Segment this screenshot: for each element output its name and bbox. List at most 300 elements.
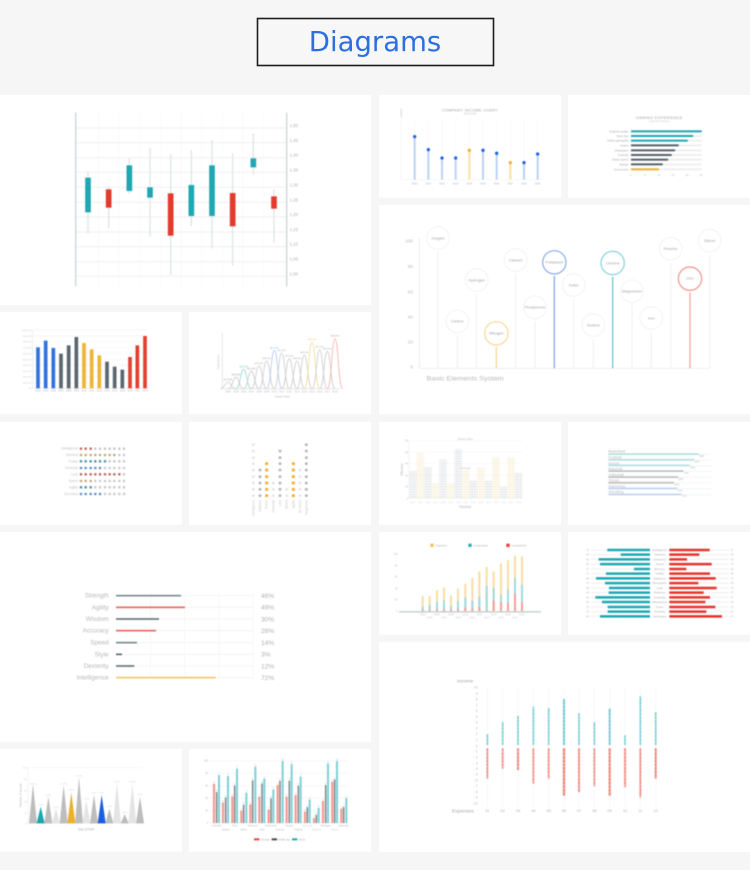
panel: yearly bar chart: 2010: [81, 389, 87, 392]
panel: grouped bars by state: Montana: [248, 825, 258, 828]
dot rows: [80, 447, 125, 495]
panel: company income chart: 2013: [453, 182, 459, 185]
panel: diverging attribute bars: 70: [586, 611, 590, 614]
panel: basic elements system: Sulfur: [569, 283, 579, 287]
panel: gaming experience: Online gameplay: [607, 139, 629, 143]
panel: fiscal year bell curves: 2013: [294, 390, 300, 393]
panel: gaming experience: Replay: [620, 162, 629, 166]
panel: stacked satisfaction bars: 2004: [420, 614, 426, 617]
panel: skill dot matrix rows: Power: [69, 459, 79, 463]
panel: stacked satisfaction bars: 40: [395, 587, 398, 590]
value labels: $48,000: [293, 358, 302, 360]
panel: triangle chart year of birth: 20: [24, 813, 27, 815]
value labels: $25,000: [232, 374, 241, 376]
panel: skill dot matrix rows: Luck: [71, 472, 78, 476]
value labels: 61: [325, 783, 327, 785]
panel: income and expenses: 12: [654, 809, 658, 813]
value labels: 68: [288, 779, 290, 781]
chart title: [636, 116, 683, 123]
value labels: 50: [216, 790, 218, 792]
value labels: 22: [340, 807, 342, 809]
panel: grouped bars by state: Minnesota: [265, 825, 277, 828]
value labels: $64,000: [323, 348, 332, 350]
price axis labels: 1,40: [290, 153, 299, 158]
panel: fiscal year bell curves: Fiscal Year: [275, 394, 290, 398]
panel: dotted column chart: 2014: [486, 502, 492, 504]
panel: diverging attribute bars: 29: [731, 558, 734, 561]
panel: basic elements system: [379, 205, 750, 414]
chart title: [442, 108, 498, 116]
panel: diverging attribute bars: 90: [586, 596, 590, 599]
red stacks: [423, 594, 522, 612]
y axis labels: - 3: [474, 761, 478, 765]
panel: triangle chart year of birth: 10,600: [129, 781, 136, 783]
panel: skill percentage bars: [0, 532, 371, 742]
value labels: 24: [318, 806, 320, 808]
value labels: 96: [327, 761, 329, 763]
panel: skill dot matrix columns: Toughness: [304, 500, 308, 515]
panel: yearly bar chart: 2017: [135, 389, 141, 392]
panel: skill percentage bars: Accuracy: [83, 628, 109, 635]
axis titles: Income: [457, 678, 474, 684]
legend: Satisfied: [435, 543, 447, 547]
panel: basic elements system: 40: [408, 315, 413, 320]
panel: triangle chart year of birth: Year of birth: [78, 828, 95, 832]
middle age bars: [217, 779, 344, 823]
curves: [220, 339, 343, 389]
panel: company income chart: 2011: [426, 182, 432, 185]
value labels: $67,000: [315, 347, 325, 349]
panel: fiscal year bell curves: 2006: [241, 390, 247, 393]
panel: skill dot matrix columns: Accuracy: [298, 500, 302, 513]
lollipop dots: [413, 135, 539, 164]
legend: Senior: [298, 838, 306, 841]
y axis labels: 0: [476, 744, 478, 748]
panel: basic elements system: Phosphorus: [525, 306, 545, 310]
panel: skill dot matrix rows: Dexterity: [65, 466, 78, 470]
panel: sports horizontal bars: Soccer: [608, 461, 620, 465]
y axis labels: - 5: [474, 773, 478, 777]
price axis labels: 1,35: [290, 168, 299, 173]
panel: gaming experience: 20: [686, 174, 689, 177]
panel: triangle chart year of birth: 5,400: [84, 798, 90, 800]
panel: diverging attribute bars: 57: [731, 592, 734, 595]
value labels: 72: [263, 776, 265, 778]
panel: company income chart: Income: [399, 108, 403, 117]
panel: stacked satisfaction bars: 60: [395, 576, 398, 579]
value labels: 64: [261, 781, 263, 783]
y axis labels: - 8: [474, 790, 478, 794]
panel: sports horizontal bars: 71%: [682, 495, 687, 498]
value labels: 18: [304, 810, 306, 812]
panel: yearly bar chart: 2015: [120, 389, 126, 392]
attribute labels: Honesty: [654, 610, 666, 614]
panel: triangle chart year of birth: 6,500: [46, 795, 52, 797]
panel: yearly bar chart: 2009: [74, 389, 80, 392]
panel: basic elements system: Oxygen: [431, 236, 445, 240]
bars: [116, 595, 216, 678]
panel: sports horizontal bars: 79%: [690, 466, 696, 469]
panel: diverging attribute bars: 85: [586, 558, 590, 561]
panel: company income chart: 2019: [535, 182, 541, 185]
panel: gaming experience: 10: [658, 174, 661, 177]
panel: triangle chart year of birth: 100: [23, 768, 27, 770]
panel: grouped bars by state: Michigan: [321, 825, 331, 828]
value labels: $53,000: [285, 356, 294, 358]
panel: sports horizontal bars: Baseball: [608, 467, 623, 471]
legend: Undecided: [473, 543, 488, 547]
panel: grouped bars by state: Ohio: [232, 825, 238, 828]
panel: diverging attribute bars: 73: [586, 573, 590, 576]
value labels: 68: [252, 778, 254, 780]
panel: diverging attribute bars: 69: [586, 592, 590, 595]
panel: diverging attribute bars: 87: [731, 615, 734, 618]
candlestick bodies: [85, 158, 277, 236]
value labels: 42: [258, 795, 260, 797]
panel: skill dot matrix rows: Speed: [68, 479, 78, 483]
percentage values: 30%: [261, 616, 274, 623]
value labels: $33,000: [239, 366, 249, 368]
panel: stacked satisfaction bars: [379, 532, 561, 635]
panel: company income chart: 2017: [508, 182, 514, 185]
panel: dotted column chart: Average: [461, 466, 471, 470]
panel: stacked satisfaction bars: 2005: [427, 617, 433, 620]
panel: grouped bars by state: Kentucky: [302, 825, 313, 828]
panel: income and expenses: [379, 642, 750, 852]
panel: gaming experience: Characters: [614, 148, 629, 152]
lollipop stems: [415, 137, 538, 180]
panel: sports horizontal bars: 68%: [679, 478, 684, 481]
price axis labels: 1,10: [290, 242, 299, 247]
price axis labels: 1,05: [290, 257, 299, 262]
panel: yearly bar chart: 2016: [127, 389, 133, 392]
panel: skill percentage bars: Strength: [85, 593, 109, 600]
senior bars: [219, 761, 346, 823]
value labels: 60: [234, 783, 236, 785]
value labels: 25: [306, 805, 308, 807]
percentage values: 3%: [261, 652, 271, 659]
value labels: $61,000: [277, 350, 287, 352]
panel: diverging attribute bars: 60: [731, 601, 734, 604]
price axis labels: [290, 123, 299, 276]
panel: yearly bar chart: 2004: [35, 389, 41, 392]
attribute labels: Charisma: [653, 557, 666, 561]
panel: company income chart: 2018: [521, 182, 527, 185]
panel: diverging attribute bars: 49: [586, 554, 590, 557]
panel: stacked satisfaction bars: 2013: [484, 617, 490, 620]
panel: dotted column chart: 50: [405, 440, 409, 443]
panel: triangle chart year of birth: 80: [24, 779, 27, 781]
percentage values: 14%: [261, 640, 274, 647]
value labels: 43: [231, 794, 233, 796]
panel: yearly bar chart: 2012: [97, 389, 103, 392]
panel: skill dot matrix rows: Intelligence: [61, 447, 78, 451]
attribute labels: Vitality: [655, 572, 665, 576]
panel: fiscal year bell curves: 2010: [272, 390, 278, 393]
y axis labels: 4: [476, 721, 478, 725]
percentage values: 12%: [261, 663, 274, 670]
panel: grouped bars by state: Utah: [259, 828, 265, 831]
panel: yearly bar chart: $20,000: [23, 377, 32, 379]
panel: company income chart: 2012: [439, 182, 445, 185]
triangles: [29, 777, 144, 823]
legend: [254, 838, 306, 841]
panel: skill dot matrix columns: Intelligence: [251, 500, 255, 516]
panel: diverging attribute bars: 79: [731, 587, 734, 590]
value labels: $85,000: [331, 336, 340, 338]
element bubbles: [427, 227, 721, 345]
panel: income and expenses: 01: [485, 809, 489, 813]
panel: triangle chart year of birth: 12,400: [76, 775, 83, 777]
value labels: 54: [272, 787, 274, 789]
panel: yearly bar chart: $0: [29, 388, 32, 390]
y axis labels: - 9: [474, 796, 478, 800]
panel: gaming experience: Story line: [617, 134, 629, 138]
value labels: $67,000: [270, 347, 279, 349]
panel: yearly bar chart: 2018: [142, 389, 148, 392]
attribute labels: Patience: [654, 591, 666, 595]
legend: Middle age: [278, 838, 291, 841]
panel: yearly bar chart: $70,000: [23, 348, 32, 350]
panel: gaming experience: Sound: [620, 143, 629, 147]
panel: triangle chart year of birth: 3,500: [38, 805, 44, 807]
panel: triangle chart year of birth: 6,800: [137, 794, 143, 796]
panel: gaming experience: Graphic quality: [609, 129, 629, 133]
panel: triangle chart year of birth: 2,900: [53, 807, 59, 809]
panel: basic elements system: Potassium: [545, 261, 563, 265]
panel: sports horizontal bars: Basketball: [608, 450, 625, 454]
axis titles: Expenses: [452, 808, 474, 814]
panel: grouped bars by state: Arkansas: [338, 825, 350, 828]
panel: stacked satisfaction bars: 2018: [519, 614, 525, 617]
value labels: 77: [218, 773, 220, 775]
panel: stacked satisfaction bars: 2016: [505, 614, 511, 617]
value labels: 70: [334, 777, 336, 779]
y axis labels: - 10: [472, 802, 478, 806]
panel: skill dot matrix columns: Speed: [285, 500, 289, 509]
panel: income and expenses: 11: [638, 809, 642, 813]
panel: grouped bars by state: Idaho: [241, 828, 247, 831]
panel: fiscal year bell curves: 2015: [309, 390, 315, 393]
panel: diverging attribute bars: 80: [586, 601, 590, 604]
value labels: 100: [281, 759, 284, 761]
panel: gaming experience: Community: [614, 167, 629, 171]
panel: fiscal year bell curves: 2016: [317, 390, 323, 393]
panel: company income chart: [379, 95, 561, 198]
price axis labels: 1,30: [290, 182, 299, 187]
panel: dotted column chart: Market Value: [458, 437, 474, 441]
panel: dotted column chart: Timeline: [459, 505, 471, 509]
panel: gaming experience: 5: [644, 174, 646, 177]
panel: gaming experience: Game speed: [612, 158, 629, 162]
panel: diverging attribute bars: 75: [586, 549, 590, 552]
price axis labels: 1,25: [290, 197, 299, 202]
panel: basic elements system: 60: [408, 289, 413, 294]
panel: basic elements system: Sodium: [587, 323, 600, 327]
panel: income and expenses: 06: [562, 809, 566, 813]
y axis labels: - 1: [474, 750, 478, 754]
panel: skill percentage bars: Wisdom: [86, 616, 109, 623]
panel: dotted column chart: 2018: [516, 502, 522, 504]
teenage bars: [214, 782, 341, 823]
attribute labels: Speed: [655, 562, 664, 566]
attribute labels: Intelligence: [652, 548, 668, 552]
y axis labels: 3: [476, 726, 478, 730]
panel: dotted column chart: 40: [405, 451, 409, 454]
panel: dotted column chart: 2006: [425, 502, 431, 504]
panel: stacked satisfaction bars: 2017: [512, 617, 518, 620]
panel: yearly bar chart: $50,000: [23, 359, 32, 361]
panel: diverging attribute bars: 48: [731, 582, 734, 585]
value labels: 42: [286, 795, 288, 797]
panel: sports horizontal bars: Swimming: [608, 484, 625, 488]
bars: [631, 130, 702, 170]
panel: dotted column chart: 20: [405, 474, 409, 477]
panel: stacked satisfaction bars: 2006: [434, 614, 440, 617]
attribute labels: Technique: [653, 614, 667, 618]
panel: yearly bar chart: $60,000: [23, 353, 32, 355]
panel: triangle chart year of birth: 8,000: [69, 790, 75, 792]
legend: [430, 543, 526, 547]
panel: dotted column chart: 2011: [463, 502, 469, 504]
panel: yearly bar chart: $90,000: [23, 336, 32, 338]
panel: yearly bar chart: $80,000: [23, 342, 32, 344]
value labels: 49: [245, 791, 247, 793]
panel: triangle chart year of birth: [0, 749, 182, 852]
panel: grouped bars by state: 100: [204, 760, 209, 763]
value labels: $48,000: [262, 358, 272, 360]
value labels: 25: [343, 805, 345, 807]
attribute labels: Diligence: [654, 576, 666, 580]
panel: yearly bar chart: $100,000: [22, 330, 32, 332]
price axis labels: 1,50: [290, 123, 299, 128]
y axis labels: 9: [476, 692, 478, 696]
title: Diagrams: [258, 18, 494, 66]
panel: stacked satisfaction bars: 2012: [477, 614, 483, 617]
value labels: 68: [279, 779, 281, 781]
panel: income and expenses: 07: [577, 809, 581, 813]
legend: Teenage: [260, 838, 270, 841]
y axis labels: - 4: [474, 767, 478, 771]
panel: diverging attribute bars: 28: [731, 568, 734, 571]
panel: yearly bar chart: 2005: [43, 389, 49, 392]
panel: grouped bars by state: 80: [205, 772, 209, 775]
value labels: 63: [213, 782, 215, 784]
right red bars: [669, 550, 722, 616]
neutral stems: [438, 252, 710, 368]
value labels: [213, 759, 347, 818]
panel: gaming experience: [568, 95, 750, 198]
panel: yearly bar chart: $40,000: [23, 365, 32, 367]
panel: diverging attribute bars: 88: [586, 577, 590, 580]
attribute labels: Perception: [653, 581, 667, 585]
panel: sports horizontal bars: Wrestling: [608, 490, 624, 494]
panel: basic elements system: Iron: [648, 316, 655, 320]
panel: yearly bar chart: [0, 312, 182, 414]
panel: yearly bar chart: $10,000: [23, 383, 32, 385]
panel: sports horizontal bars: 88%: [699, 455, 705, 458]
panel: income and expenses: 03: [516, 809, 520, 813]
panel: triangle chart year of birth: 10,500: [114, 782, 121, 784]
value labels: $80,000: [308, 339, 317, 341]
panel: skill dot matrix rows: Accuracy: [64, 492, 78, 496]
panel: diverging attribute bars: 78: [731, 606, 734, 609]
percentage values: 28%: [261, 628, 274, 635]
panel: diverging attribute bars: 68: [586, 587, 590, 590]
panel: skill dot matrix columns: Dexterity: [271, 500, 275, 512]
panel: skill dot matrix rows: Stamina: [66, 453, 78, 457]
panel: fiscal year bell curves: 2005: [233, 390, 239, 393]
panel: basic elements system: Magnesium: [622, 290, 642, 294]
panel: yearly bar chart: 2007: [58, 389, 64, 392]
orange stacks: [423, 556, 522, 612]
panel: dotted column chart: 0: [407, 497, 409, 500]
panel: diverging attribute bars: 67: [731, 549, 734, 552]
panel: dotted column chart: 2013: [478, 502, 484, 504]
panel: stacked satisfaction bars: 80: [395, 564, 398, 567]
panel: triangle chart year of birth: 2,800: [107, 806, 113, 808]
panel: dotted column chart: 2008: [440, 502, 446, 504]
panel: skill percentage bars: Speed: [90, 640, 109, 647]
y axis labels: 2: [476, 732, 478, 736]
value labels: 95: [291, 762, 293, 764]
panel: fiscal year bell curves: 2012: [287, 390, 293, 393]
panel: stacked satisfaction bars: 2007: [441, 617, 447, 620]
y axis labels: 5: [476, 715, 478, 719]
value labels: 76: [227, 774, 229, 776]
value labels: 45: [295, 793, 297, 795]
percentage values: 72%: [261, 675, 274, 682]
bar tracks: [631, 130, 702, 170]
attribute labels: Memory: [654, 567, 666, 571]
panel: grouped bars by state: Arizona: [276, 828, 285, 831]
panel: income and expenses: 04: [531, 809, 536, 813]
panel: fiscal year bell curves: 2009: [264, 390, 270, 393]
panel: grouped bars by state: Colorado: [212, 825, 222, 828]
panel: dotted column chart: Effective: [400, 463, 404, 476]
panel: grouped bars by state: 40: [205, 797, 209, 800]
chart title: GAMING EXPERIENCE: [636, 116, 683, 120]
panel: company income chart: 2015: [480, 182, 486, 185]
chart title: Important factors: [649, 119, 670, 123]
panel: gaming experience: 25: [700, 174, 703, 177]
panel: diverging attribute bars: 67: [731, 596, 734, 599]
panel: company income chart: 2010: [412, 182, 418, 185]
panel: triangle chart year of birth: Number of people: [18, 783, 22, 807]
panel: dotted column chart: 2005: [418, 502, 424, 504]
price axis labels: 1,45: [290, 138, 299, 143]
axis titles: [452, 678, 474, 814]
value labels: 87: [236, 767, 238, 769]
panel: grouped bars by state: Oregon: [285, 825, 294, 828]
panel: basic elements system: Carbon: [451, 320, 464, 324]
panel: dotted column chart: 2016: [501, 502, 507, 504]
panel: dotted column chart: 30: [405, 463, 409, 466]
panel: fiscal year bell curves: 2017: [325, 390, 331, 393]
panel: skill dot matrix columns: Luck: [278, 500, 282, 507]
chart title: 2010-2019: [464, 112, 477, 116]
panel: diverging attribute bars: 27: [586, 568, 590, 571]
y axis labels: - 2: [474, 756, 478, 760]
panel: sports horizontal bars: Volleyball: [608, 473, 624, 477]
panel: dotted column chart: 2010: [456, 502, 462, 504]
panel: yearly bar chart: 2014: [112, 389, 118, 392]
panel: basic elements system: 80: [408, 264, 413, 269]
y axis labels: [472, 686, 478, 806]
value labels: 90: [254, 765, 256, 767]
panel: basic elements system: Zinc: [686, 277, 694, 281]
expense bars: [487, 748, 656, 797]
